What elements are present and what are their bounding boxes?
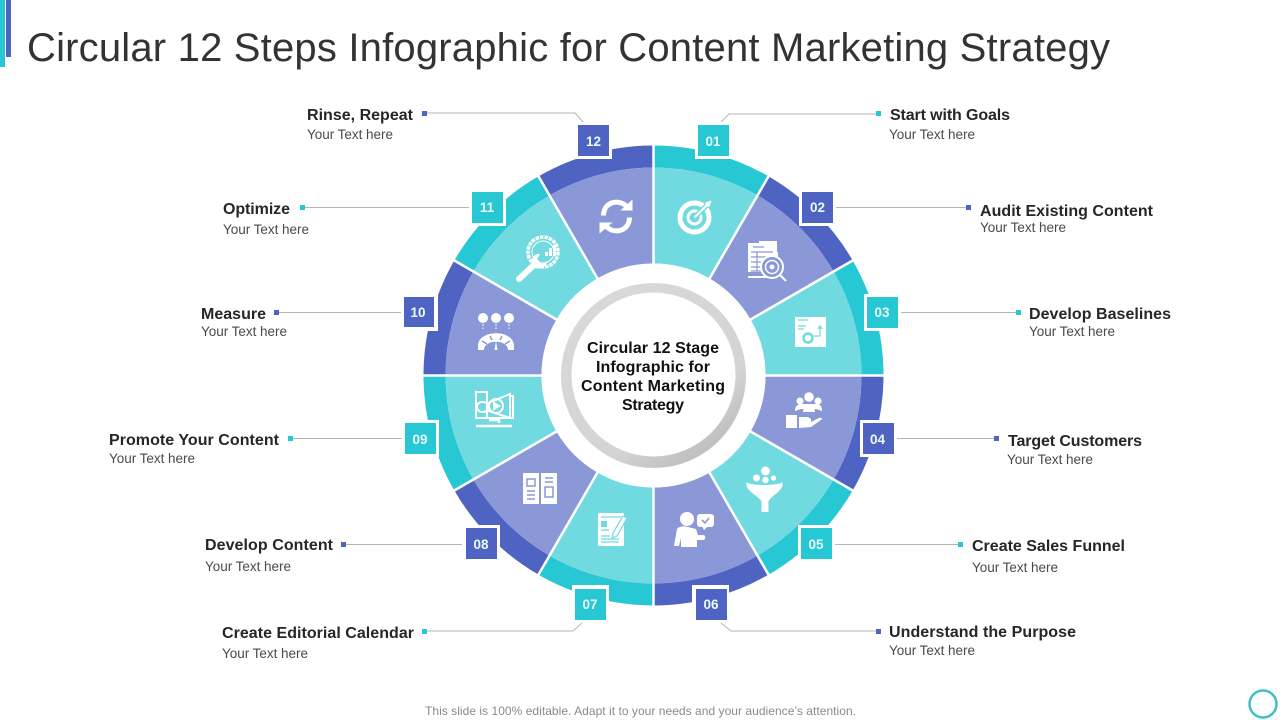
- step 01 callout: 01: [705, 134, 721, 149]
- step 05 callout: Your Text here: [972, 560, 1058, 575]
- segment 12: [538, 119, 705, 291]
- circular wheel: [397, 119, 910, 632]
- center hub: [542, 264, 766, 488]
- step 01 callout: [695, 107, 1010, 159]
- step 06 callout: [692, 585, 1076, 658]
- step 10 callout: Measure: [201, 306, 266, 323]
- step 04 callout: [860, 420, 1142, 467]
- step 10 callout: [201, 294, 438, 339]
- step 10 callout: Your Text here: [201, 324, 287, 339]
- center text: Content Marketing: [581, 378, 725, 395]
- icon: refresh arrows: [600, 200, 632, 234]
- segment 03: [738, 260, 910, 427]
- step 02 callout: 02: [810, 200, 825, 215]
- segment 05: [680, 424, 853, 590]
- segment 09: [397, 324, 569, 490]
- segment 06: [602, 460, 768, 632]
- icon: person with speech bubble: [674, 512, 714, 547]
- icon: sales funnel: [746, 466, 783, 512]
- step 06 callout: 06: [703, 597, 719, 612]
- step 11 callout: 11: [480, 200, 495, 215]
- step 01 callout: Your Text here: [889, 127, 975, 142]
- segment 07: [538, 472, 654, 606]
- step 12 callout: [307, 107, 612, 159]
- step 01 callout: Start with Goals: [890, 107, 1010, 124]
- segment 08: [439, 402, 605, 575]
- segment 02: [702, 176, 868, 349]
- step 06 callout: Understand the Purpose: [889, 624, 1076, 641]
- step 09 callout: 09: [412, 432, 428, 447]
- step 05 callout: Create Sales Funnel: [972, 538, 1125, 555]
- title: Circular 12 Steps Infographic for Content Marketing Strategy: [27, 26, 1110, 70]
- step 11 callout: Your Text here: [223, 222, 309, 237]
- step 04 callout: Your Text here: [1007, 452, 1093, 467]
- step 02 callout: [799, 189, 1154, 235]
- center text: Circular 12 Stage: [587, 340, 719, 357]
- segment 04: [750, 376, 884, 490]
- step 11 callout: Optimize: [223, 201, 290, 218]
- segment 01: [654, 146, 768, 278]
- step 03 callout: Your Text here: [1029, 324, 1115, 339]
- step 04 callout: Target Customers: [1008, 433, 1142, 450]
- step 09 callout: Your Text here: [109, 451, 195, 466]
- step 08 callout: [205, 525, 500, 574]
- segment 10: [424, 260, 556, 376]
- segment 11: [454, 161, 627, 327]
- step 06 callout: Your Text here: [889, 643, 975, 658]
- step 10 callout: 10: [410, 305, 426, 320]
- step 08 callout: Your Text here: [205, 559, 291, 574]
- step 04 callout: 04: [870, 432, 885, 447]
- step 03 callout: 03: [874, 305, 890, 320]
- step 09 callout: Promote Your Content: [109, 432, 280, 449]
- step 11 callout: [223, 189, 506, 237]
- icon: target: [680, 200, 712, 232]
- icon: browser with gear: [795, 317, 826, 347]
- icon: wrench with chart: [519, 237, 558, 279]
- center text: Strategy: [622, 397, 684, 414]
- step 02 callout: Audit Existing Content: [980, 203, 1154, 220]
- step 12 callout: Your Text here: [307, 127, 393, 142]
- icon: open book: [523, 473, 557, 504]
- step 02 callout: Your Text here: [980, 220, 1066, 235]
- step 07 callout: [222, 585, 609, 661]
- center text: [581, 340, 725, 414]
- step 09 callout: [109, 420, 439, 466]
- icon: customers on hand: [786, 392, 822, 428]
- step 08 callout: Develop Content: [205, 537, 334, 554]
- step 05 callout: [798, 525, 1125, 575]
- step 07 callout: Your Text here: [222, 646, 308, 661]
- step 07 callout: 07: [582, 597, 598, 612]
- step 03 callout: Develop Baselines: [1029, 306, 1171, 323]
- corner circle: [1250, 690, 1276, 718]
- icon: performance gauge: [478, 313, 514, 350]
- icon: document audit: [748, 241, 786, 281]
- step 08 callout: 08: [473, 537, 489, 552]
- step 12 callout: 12: [586, 134, 601, 149]
- center text: Infographic for: [596, 359, 710, 376]
- footer note: This slide is 100% editable. Adapt it to your needs and your audience’s attention.: [425, 704, 856, 718]
- accent bars: [0, 0, 11, 67]
- step 12 callout: Rinse, Repeat: [307, 107, 414, 124]
- icon: newspaper: [598, 513, 627, 546]
- step 07 callout: Create Editorial Calendar: [222, 625, 414, 642]
- step 05 callout: 05: [808, 537, 824, 552]
- icon: video megaphone: [476, 392, 513, 426]
- step 03 callout: [864, 294, 1171, 339]
